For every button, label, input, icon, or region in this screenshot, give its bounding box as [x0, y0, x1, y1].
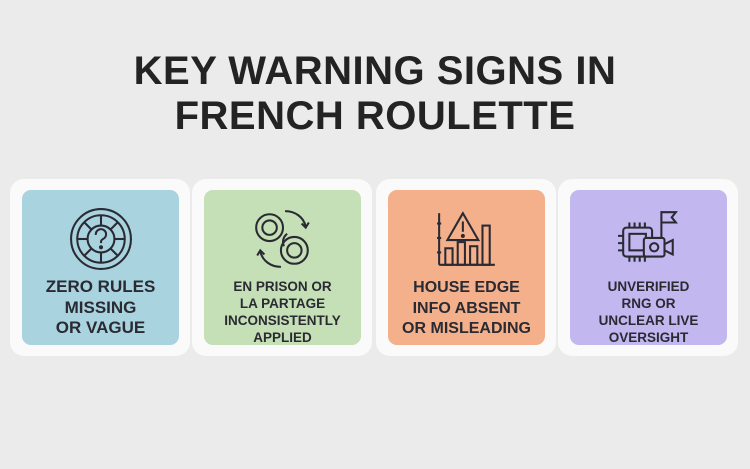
label: RNG OR: [622, 296, 676, 311]
card: zero rules: [10, 179, 190, 356]
label: HOUSE EDGE: [413, 279, 520, 296]
title: KEY WARNING SIGNS IN: [134, 49, 616, 93]
label: INFO ABSENT: [413, 300, 520, 316]
label: [224, 279, 341, 345]
label: MISSING: [65, 298, 136, 316]
icon: warning chart: [437, 211, 495, 266]
card: unverified rng: [558, 179, 738, 356]
label: APPLIED: [253, 330, 312, 345]
label: LA PARTAGE: [240, 296, 325, 311]
label: INCONSISTENTLY: [224, 313, 341, 328]
label: OR VAGUE: [56, 318, 145, 337]
title: [134, 49, 616, 138]
label: UNVERIFIED: [608, 279, 689, 294]
icon: chip camera flag: [618, 211, 678, 262]
icon: roulette wheel with question: [70, 208, 132, 270]
label: ZERO RULES: [46, 277, 155, 296]
label: UNCLEAR LIVE: [599, 313, 698, 328]
label: EN PRISON OR: [233, 279, 332, 294]
label: OR MISLEADING: [402, 320, 531, 337]
label: OVERSIGHT: [609, 330, 688, 345]
card: house edge: [376, 179, 556, 356]
title: FRENCH ROULETTE: [175, 94, 575, 138]
icon: chips with arrows: [255, 210, 310, 268]
card: en prison: [192, 179, 372, 356]
label: [402, 279, 531, 337]
label: [599, 279, 698, 345]
label: [46, 277, 155, 337]
